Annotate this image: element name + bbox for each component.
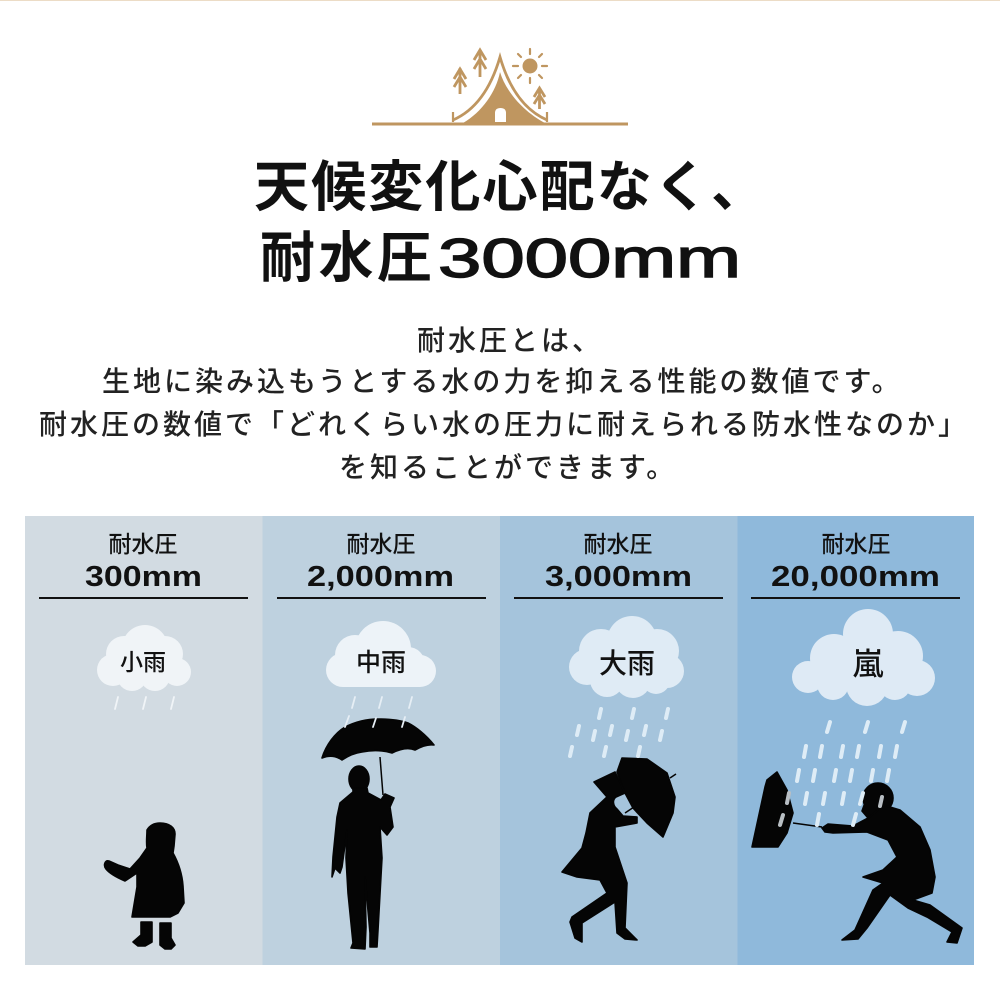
cloud: 嵐: 嵐 xyxy=(852,647,884,682)
description text: 耐水圧の数値で「どれくらい水の圧力に耐えられる防水性なのか」 xyxy=(39,409,969,440)
title xyxy=(254,156,766,289)
heading: 2,000mm: 2,000mm xyxy=(307,561,454,593)
heading: 3,000mm: 3,000mm xyxy=(545,561,692,593)
cloud: 嵐 xyxy=(792,609,935,706)
panel: 2,000mm moderate rain xyxy=(262,516,500,965)
heading: 3,000mm: 耐水圧 xyxy=(584,531,652,557)
panel: 3,000mm heavy rain xyxy=(500,516,738,965)
heading: 3,000mm xyxy=(514,531,723,599)
cloud: 大雨 xyxy=(569,616,684,698)
heading: 300mm: 耐水圧 xyxy=(108,531,178,557)
title: 耐水圧 xyxy=(260,227,432,289)
description text: 耐水圧とは、 xyxy=(417,325,603,356)
title: 天候変化心配なく、 xyxy=(254,156,766,218)
title: 3000mm xyxy=(438,227,741,289)
rain xyxy=(345,697,412,727)
silhouette: man with umbrella xyxy=(322,719,434,949)
description text: 生地に染み込もうとする水の力を抑える性能の数値です。 xyxy=(102,366,903,397)
rain xyxy=(115,697,174,709)
heading: 300mm xyxy=(39,531,248,599)
cloud: 大雨: 大雨 xyxy=(599,648,655,679)
panel: 300mm light rain xyxy=(25,516,262,965)
cloud: 中雨: 中雨 xyxy=(356,649,406,677)
cloud: 小雨 xyxy=(97,625,191,691)
silhouette: child xyxy=(105,823,184,949)
heading: 20,000mm: 耐水圧 xyxy=(822,531,890,557)
cloud: 中雨 xyxy=(326,621,436,687)
panel: 20,000mm storm xyxy=(738,516,974,965)
icon: tent with trees and sun xyxy=(372,49,628,126)
rain xyxy=(797,722,905,825)
cloud: 小雨: 小雨 xyxy=(120,649,166,675)
description text xyxy=(39,325,969,483)
silhouette: person with umbrella in wind xyxy=(562,758,676,942)
heading: 20,000mm xyxy=(751,531,960,599)
heading: 20,000mm: 20,000mm xyxy=(771,561,940,593)
silhouette: person with inverted umbrella xyxy=(752,772,962,943)
rain xyxy=(570,709,668,756)
description text: を知ることができます。 xyxy=(339,452,677,483)
heading: 2,000mm xyxy=(277,531,486,599)
heading: 2,000mm: 耐水圧 xyxy=(346,531,416,557)
heading: 300mm: 300mm xyxy=(85,561,202,593)
